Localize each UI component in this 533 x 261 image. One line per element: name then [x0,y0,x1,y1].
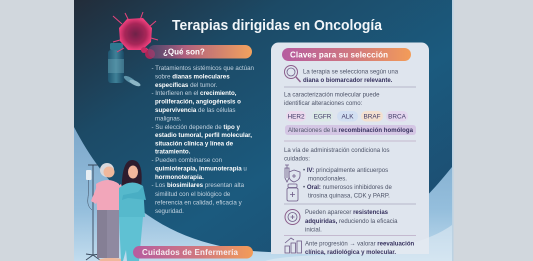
chip: ALK: ALK [341,114,354,121]
text: molecular characterization [284,92,380,107]
icon: IV pole [86,165,100,260]
icon: progression bars [285,238,302,253]
text block: ¿Qué son? list: sobre dianas moleculares [155,74,230,80]
text: biomarker: diana o biomarcador relevante. [303,78,393,84]
text: IV and oral: monoclonales. [308,176,347,182]
text block: ¿Qué son? list: - Pueden combinarse con [152,157,223,164]
illustration: tumor cell and medication [108,12,158,88]
chip: BRAF: BRAF [363,114,381,121]
heading: Claves para su selección: Claves para su selección [290,50,388,60]
chip: BRCA: BRCA [388,114,407,121]
icon: syringe and shield [285,165,300,182]
text: molecular characterization: identificar alteraciones como: [284,101,363,107]
text block: ¿Qué son? list: - Su elección depende de tipo y [152,124,240,131]
figure: nurse [119,160,146,261]
text: administration: cuidados: [284,156,310,162]
text block: ¿Qué son? list: tratamiento. [155,148,191,156]
heading: Cuidados de Enfermería: Cuidados de Enfermería [142,248,239,257]
text block: ¿Qué son? list: similitud con el biológico de [155,191,231,198]
text: biomarker: La terapia se selecciona según una [303,69,399,75]
text: administration: La vía de administración condiciona los [284,148,390,154]
text: IV and oral: • IV: principalmente anticuerpos [303,168,388,174]
text block: ¿Qué son? list: supervivencia de las células [155,107,236,114]
text: administration [284,148,390,162]
figure: patient [91,163,126,261]
text: resistances [305,210,398,234]
text block: ¿Qué son? list: situación clínica y línea de [155,140,234,148]
text block: ¿Qué son? list: proliferación, angiogénesis o [155,98,241,106]
heading: Cuidados de Enfermería [133,246,253,258]
chip: HER2: HER2 [287,114,305,121]
text block: ¿Qué son? list: quimioterapia, inmunoterapia u [155,166,247,172]
text block: ¿Qué son? list: malignas. [155,116,182,122]
illustration: nurse with patient and IV pole [86,160,146,261]
text: IV and oral: • Oral: numerosos inhibidores de [303,185,392,191]
text: molecular characterization: La caracterización molecular puede [284,92,380,98]
chip: recombinación homóloga: Alteraciones de la recombinación homóloga [288,128,414,134]
text: progression [305,241,415,256]
heading: ¿Qué son?: ¿Qué son? [163,48,205,56]
text block: ¿Qué son? list: referencia en calidad, eficacia y [155,200,243,206]
chips: molecular alterations [285,111,416,135]
text: IV and oral: tirosina quinasa, CDK y PARP. [308,194,390,200]
text: biomarker [303,69,399,84]
text block: ¿Qué son? list: - Los biosimilares presentan alta [152,182,245,189]
text block: ¿Qué son? list [152,65,255,215]
text: resistances: adquiridas, reduciendo la eficacia [305,219,398,225]
panel: claves para su selección [265,42,452,261]
text: resistances: inicial. [305,228,322,234]
icon: medicine bottle [108,43,141,88]
text: IV and oral [303,168,392,200]
text: progression: clínica, radiológica y molecular. [305,250,396,256]
text block: ¿Qué son? list: específicas del tumor. [155,82,218,89]
icon: magnifier biomarker [284,66,300,82]
text: resistances: Pueden aparecer resistencias [305,210,389,216]
text: progression: Ante progresión → valorar reevaluación [305,241,415,247]
panel: infographic background [74,0,454,261]
text block: ¿Qué son? list: - Tratamientos sistémicos que actúan [152,65,255,72]
text block: ¿Qué son? list: hormonoterapia. [155,174,204,181]
text block: ¿Qué son? list: estadio tumoral, perfil molecular, [155,132,252,139]
chip: EGFR: EGFR [314,114,332,121]
icon: tumor cell [113,12,158,59]
heading: ¿Qué son? [148,45,252,58]
text block: ¿Qué son? list: - Interfieren en el crecimiento, [152,90,237,97]
title: Terapias dirigidas en Oncología [172,17,383,34]
icon: resistance target [285,210,300,224]
text block: ¿Qué son? list: seguridad. [155,208,184,215]
icon: pill bottle [287,184,298,201]
heading: Claves para su selección [282,48,411,61]
